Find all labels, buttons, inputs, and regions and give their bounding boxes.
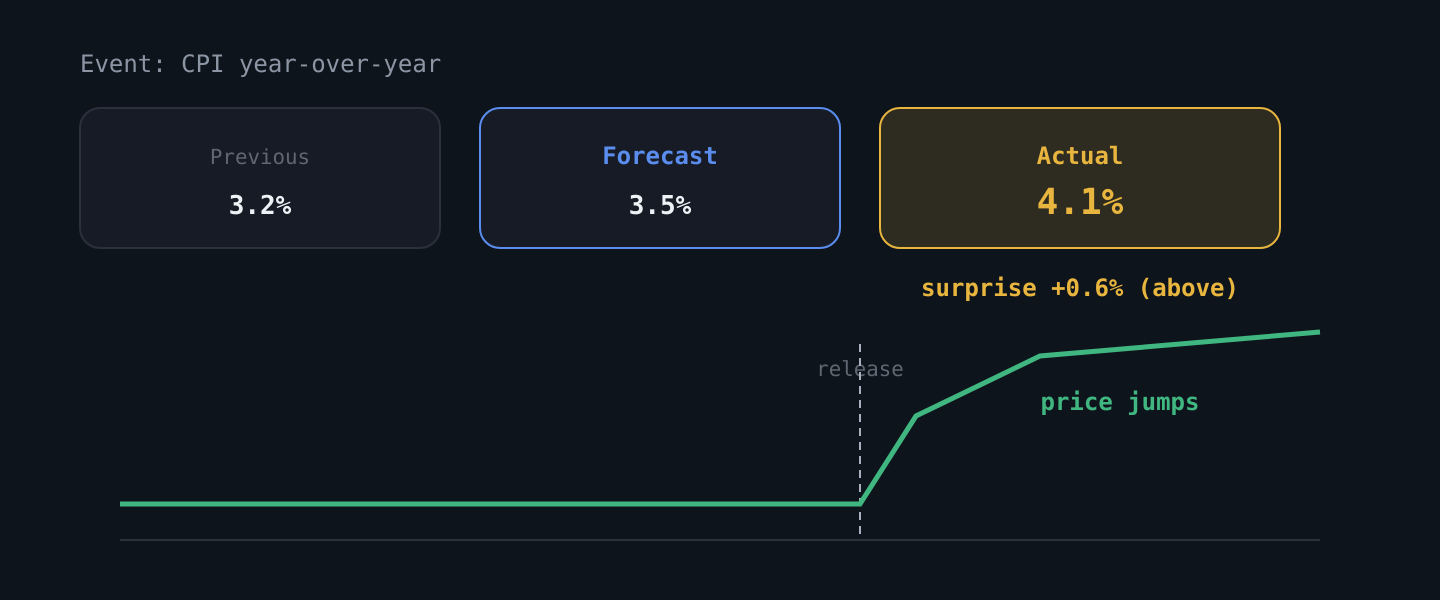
value: previous: 3.2% <box>229 191 292 221</box>
label: price jumps: price jumps <box>1041 388 1199 416</box>
value: actual: 4.1% <box>1037 182 1124 223</box>
callout: surprise: surprise +0.6% (above) <box>921 274 1239 302</box>
marker: release line <box>859 344 861 536</box>
chart: price line <box>120 332 1320 504</box>
label: release: release <box>816 357 904 381</box>
panel: actual <box>880 108 1280 248</box>
value: forecast: 3.5% <box>629 191 692 221</box>
label: previous: Previous <box>210 145 310 169</box>
panel: previous <box>80 108 440 248</box>
label: actual: Actual <box>1037 142 1123 170</box>
label: forecast: Forecast <box>602 142 718 170</box>
heading: event: Event: CPI year-over-year <box>80 50 441 78</box>
panel: forecast <box>480 108 840 248</box>
